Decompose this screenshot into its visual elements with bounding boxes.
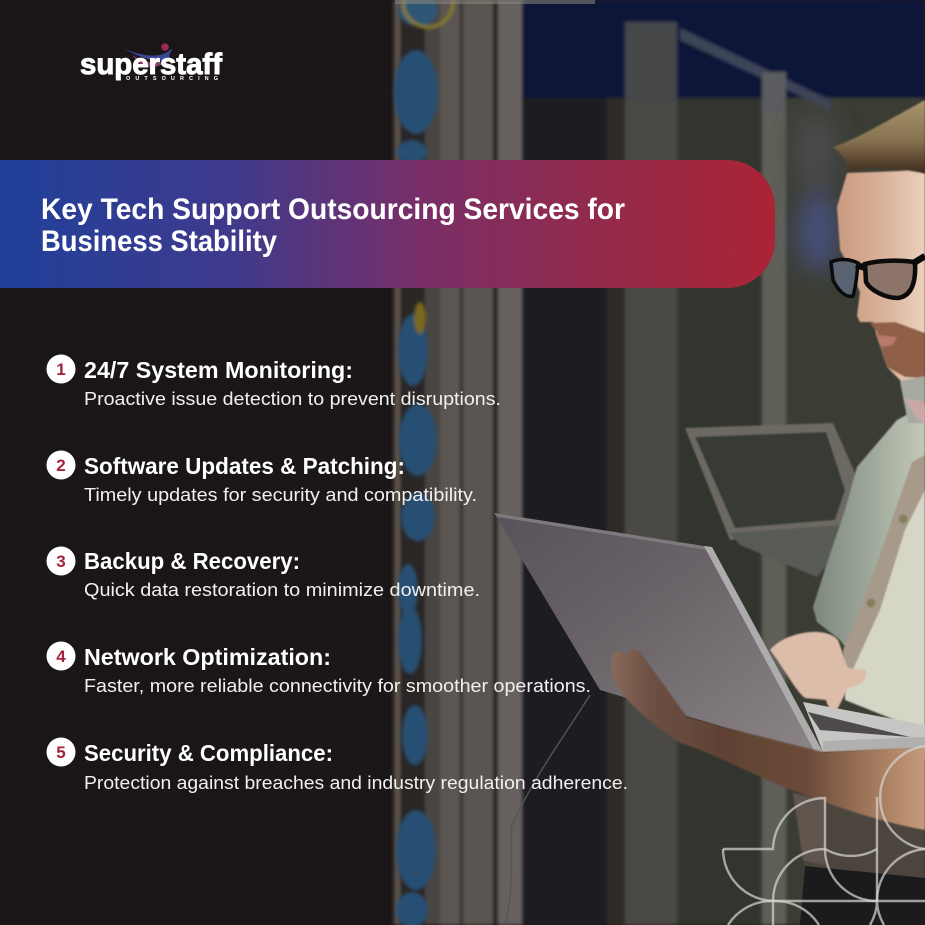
number badge 2 xyxy=(46,450,76,480)
number badge 1: 1 xyxy=(56,360,66,379)
logo subtitle: OUTSOURCING xyxy=(126,76,218,82)
man: forearm and left hand under laptop xyxy=(611,650,925,830)
number badge 2: 2 xyxy=(56,456,66,475)
item 3 heading: Backup & Recovery: xyxy=(84,548,300,574)
blurred wall tones xyxy=(791,110,839,272)
list item 1 xyxy=(46,354,501,409)
man: right hand on keyboard xyxy=(770,632,866,710)
list item 2 xyxy=(46,450,477,505)
title text: Business Stability xyxy=(41,225,277,258)
number badge 4: 4 xyxy=(56,647,66,666)
item 1 description: Proactive issue detection to prevent disruptions. xyxy=(84,388,501,409)
list item 5 xyxy=(46,738,628,793)
list item 3 xyxy=(46,546,480,600)
dark pants xyxy=(800,866,925,925)
shirt tail and belt area xyxy=(793,793,925,880)
title banner xyxy=(0,160,775,288)
number badge 5 xyxy=(46,738,76,766)
network cables xyxy=(394,0,453,925)
top bright strip xyxy=(395,0,595,4)
background laptop xyxy=(685,423,858,577)
title text: Key Tech Support Outsourcing Services for xyxy=(41,193,625,226)
laptop xyxy=(494,513,925,752)
item 5 description: Protection against breaches and industry regulation adherence. xyxy=(84,772,628,793)
item 3 description: Quick data restoration to minimize downtime. xyxy=(84,579,480,600)
number badge 5: 5 xyxy=(56,743,66,762)
logo xyxy=(80,43,223,82)
cable xyxy=(505,695,590,925)
number badge 4 xyxy=(46,642,76,670)
number badge 3: 3 xyxy=(56,552,66,571)
item 2 heading: Software Updates & Patching: xyxy=(84,453,405,479)
list item 4 xyxy=(46,642,591,696)
logo swoosh xyxy=(120,43,172,67)
logo wordmark: superstaff xyxy=(80,48,223,81)
number badge 1 xyxy=(46,354,76,384)
item 2 description: Timely updates for security and compatibility. xyxy=(84,484,477,505)
item 1 heading: 24/7 System Monitoring: xyxy=(84,357,353,383)
man: glasses xyxy=(831,256,925,298)
man: head with hair and beard xyxy=(833,100,925,423)
item 4 heading: Network Optimization: xyxy=(84,644,331,670)
item 5 heading: Security & Compliance: xyxy=(84,740,333,766)
number badge 3 xyxy=(46,546,76,576)
man: shirt xyxy=(813,405,925,760)
item 4 description: Faster, more reliable connectivity for smoother operations. xyxy=(84,675,591,696)
decorative line pattern xyxy=(723,746,925,925)
